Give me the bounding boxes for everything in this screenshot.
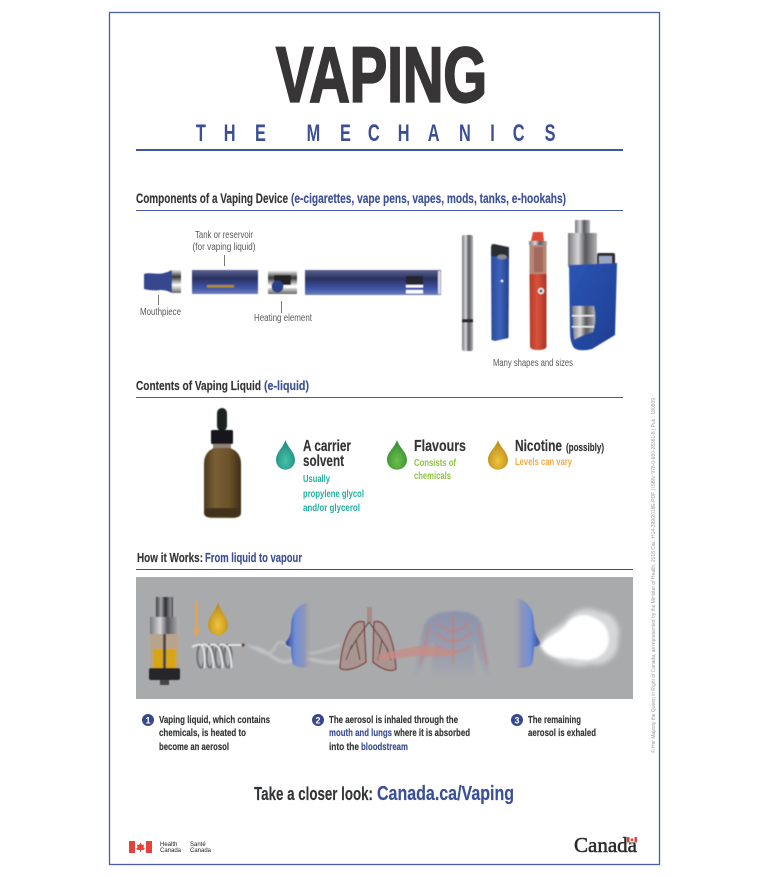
step 1: 1 [145,716,151,726]
illustration: aerosol in bloodstream [378,646,459,660]
label: tank or reservoir [192,230,256,266]
heading: contents: (e-liquid) [264,378,309,393]
label: heating element: Heating element [254,313,312,324]
icon: gold drop [488,440,508,470]
step 2: 2 [315,716,321,726]
step 2: The aerosol is inhaled through the [329,714,458,726]
heading: components [136,190,623,211]
step 3: 3 [514,716,520,726]
title: VAPING [276,31,487,119]
logo: Health Canada signature: Santé [190,842,206,848]
illustration: vape tank [149,597,180,685]
item: flavours: Consists of [414,457,456,469]
illustration: red pen vape [529,232,547,350]
item: nicotine [488,438,604,470]
illustration: blue box mod [568,220,617,350]
illustration: face inhaling [286,602,312,668]
item: carrier solvent: Usually [303,473,330,485]
illustration: silver e-cigarette [462,235,473,351]
step 2: mouth and lungs [329,727,392,739]
item: nicotine: Nicotine [515,438,562,455]
item: flavours: Flavours [414,438,466,455]
icon: orange arrow [194,601,199,635]
logo: Health Canada signature: Canada [160,848,182,854]
item: carrier solvent [276,438,364,514]
illustration: face exhaling [513,598,540,668]
illustration: disassembled vape pen [144,270,441,295]
item: carrier solvent: propylene glycol [303,488,364,500]
heading: contents: Contents of Vaping Liquid [136,378,261,393]
diagram: liquid to vapour [136,577,633,699]
illustration: exhaled cloud [540,609,619,666]
illustration: vapour stream [248,642,345,663]
illustration: dropper bottle [204,408,241,518]
label: tank or reservoir: Tank or reservoir [195,230,254,241]
item: carrier solvent: A carrier [303,438,351,455]
step 2: where it is absorbed [393,727,470,739]
label: many shapes and sizes: Many shapes and sizes [493,358,573,369]
heading: components: Components of a Vaping Device [136,190,288,206]
step 3: aerosol is exhaled [528,727,596,739]
step 1: become an aerosol [159,741,229,753]
label: tank or reservoir: (for vaping liquid) [192,242,256,253]
label: mouthpiece [140,295,181,318]
heating element [268,271,297,294]
illustration: lungs [340,607,396,670]
call to action: Canada.ca/Vaping [377,783,514,805]
item: flavours: chemicals [414,470,451,482]
step 3 [511,714,596,739]
page border [110,12,660,864]
step 1 [142,714,270,753]
heading: contents [136,378,623,398]
tank [192,270,258,294]
logo: Health Canada signature [129,841,212,854]
logo: Canada wordmark: Canada [574,833,638,857]
heading: how it works: From liquid to vapour [205,550,302,565]
item: carrier solvent: solvent [303,453,344,470]
logo: Health Canada signature: Canada [190,848,212,854]
panel: how it works [136,550,633,753]
icon: teal drop [276,440,295,470]
step 2 [312,714,470,753]
copyright note: © Her Majesty the Queen in Right of Canada, as represented by the Minister of Health, 2018 Cat.: H14-399/2018E-PDF | ISBN: 978-0-660-28361-8 | Pub.: 180909 [650,398,657,753]
call to action: Take a closer look: [254,784,373,804]
mouthpiece [144,270,181,293]
step 2: bloodstream [361,741,408,753]
item: nicotine: (possibly) [566,442,604,454]
illustration: heating coil [192,643,245,668]
illustration: blue pod vape [491,244,509,341]
step 3: The remaining [528,714,581,726]
step 2: into the [329,741,359,753]
step 1: Vaping liquid, which contains [159,714,270,726]
label: heating element [254,301,312,324]
heading: components: (e-cigarettes, vape pens, vapes, mods, tanks, e-hookahs) [291,190,566,206]
label: mouthpiece: Mouthpiece [140,307,181,318]
icon: liquid drop [208,602,228,635]
item: flavours [387,438,466,482]
panel: contents of vaping liquid [136,378,623,518]
item: carrier solvent: and/or glycerol [303,502,360,514]
heading: how it works [136,550,633,570]
subtitle: THE MECHANICS [196,120,556,147]
illustration: body with blood vessels [413,611,491,680]
step 1: chemicals, is heated to [159,727,246,739]
heading: how it works: How it Works: [137,550,203,565]
item: nicotine: Levels can vary [515,456,572,468]
logo: Health Canada signature: Health [160,842,177,848]
icon: green drop [387,440,407,470]
call to action [254,783,514,805]
panel: components of a vaping device [136,190,623,369]
battery body [305,270,441,295]
